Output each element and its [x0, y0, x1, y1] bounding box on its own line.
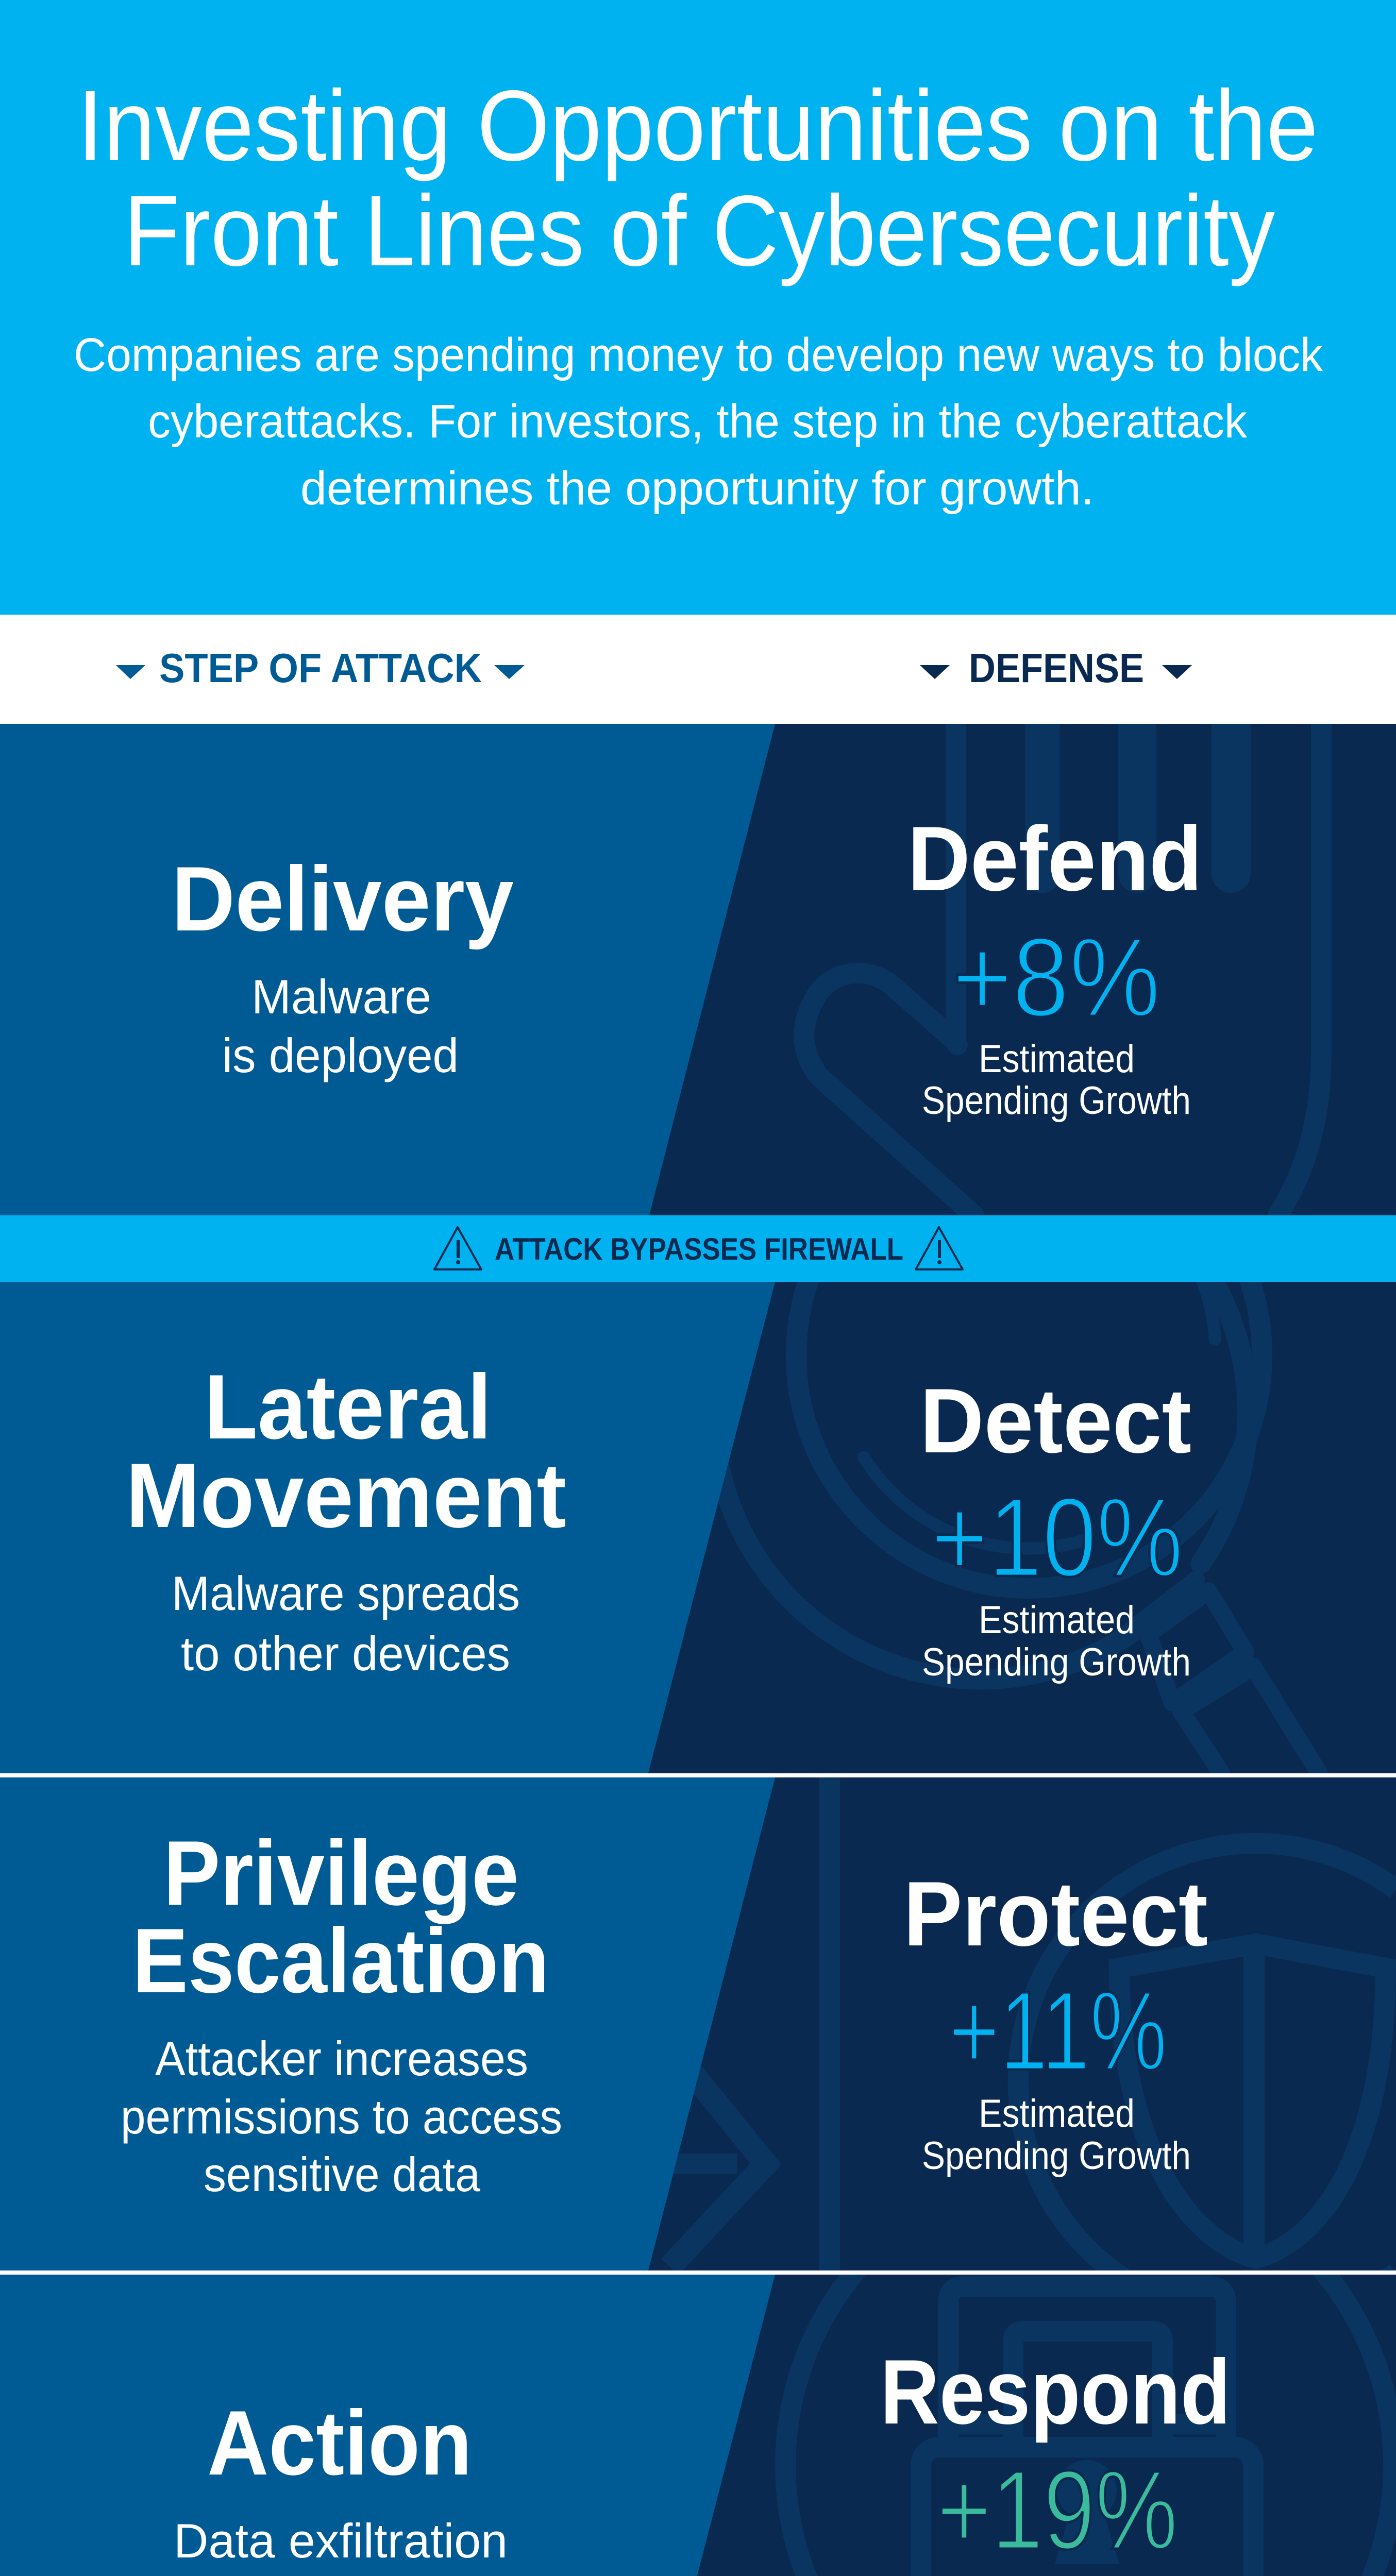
icon: warning triangle left: [434, 1227, 481, 1269]
defense text: protect: Protect: [903, 1862, 1208, 1965]
warning band: [0, 1215, 1396, 1282]
defense text: detect: Spending Growth: [922, 1640, 1191, 1684]
title: [77, 70, 1318, 287]
step text: privilege escalation: Escalation: [132, 1909, 549, 2012]
step text: lateral movement: Movement: [126, 1444, 566, 1547]
defense text: respond: +19%: [937, 2448, 1178, 2573]
step text: delivery: Malware: [251, 970, 431, 1024]
column header band: [0, 615, 1396, 724]
title: Investing Opportunities on the: [77, 70, 1318, 182]
icon: ghost hand: [804, 724, 1321, 1215]
step text: lateral movement: to other devices: [181, 1626, 510, 1681]
defense text: detect: [920, 1369, 1191, 1684]
icon: ghost shield with arrow: [662, 1777, 1396, 2270]
defense text: protect: Estimated: [979, 2092, 1135, 2136]
left blue wedge: [0, 724, 775, 1215]
defense text: respond: [880, 2341, 1231, 2576]
step text: privilege escalation: sensitive data: [204, 2147, 481, 2201]
step text: delivery: Delivery: [172, 848, 514, 950]
icon: warning triangle right: [916, 1227, 963, 1269]
step text: lateral movement: [126, 1355, 566, 1681]
left blue wedge: [0, 1282, 775, 1773]
defense text: detect: +10%: [931, 1475, 1183, 1600]
left blue wedge: [0, 1777, 775, 2270]
intro paragraph: Companies are spending money to develop new ways to block: [74, 329, 1323, 381]
defense text: defend: +8%: [952, 915, 1160, 1040]
defense text: detect: Estimated: [979, 1598, 1135, 1642]
panel: lateral movement / detect: [0, 1282, 1328, 1773]
defense text: protect: [903, 1862, 1208, 2178]
panel: delivery / defend: [0, 724, 1396, 1215]
defense text: defend: Defend: [907, 807, 1202, 910]
panel: action / respond: [0, 2275, 1396, 2576]
step text: action: Data exfiltration: [174, 2514, 508, 2568]
icon: ghost magnifying glass: [718, 1282, 1328, 1773]
defense text: defend: Spending Growth: [922, 1079, 1191, 1123]
header panel: [0, 0, 1396, 615]
warning label: ATTACK BYPASSES FIREWALL: [495, 1232, 903, 1266]
step text: privilege escalation: permissions to access: [121, 2090, 562, 2144]
heading: step of attack: STEP OF ATTACK: [159, 645, 482, 691]
defense text: defend: Estimated: [979, 1037, 1135, 1081]
icon: ghost chat bubble with lock: [775, 2275, 1396, 2576]
step text: lateral movement: Malware spreads: [172, 1566, 520, 1620]
step text: delivery: is deployed: [222, 1028, 459, 1082]
step text: action: Action: [207, 2392, 472, 2494]
step text: lateral movement: Lateral: [204, 1355, 492, 1458]
title: Front Lines of Cybersecurity: [124, 175, 1275, 287]
step text: delivery: [172, 848, 514, 1082]
step text: privilege escalation: Privilege: [163, 1822, 519, 1924]
step text: action: [119, 2392, 564, 2576]
heading: defense: DEFENSE: [969, 645, 1144, 691]
defense text: protect: +11%: [949, 1969, 1167, 2094]
left blue wedge: [0, 2275, 775, 2576]
step text: privilege escalation: Attacker increases: [155, 2031, 528, 2086]
defense text: protect: Spending Growth: [922, 2134, 1191, 2178]
intro paragraph: determines the opportunity for growth.: [300, 462, 1094, 515]
panel: privilege escalation / protect: [0, 1777, 1396, 2318]
defense text: defend: [907, 807, 1202, 1123]
intro paragraph: [74, 329, 1323, 515]
step text: privilege escalation: [121, 1822, 562, 2201]
intro paragraph: cyberattacks. For investors, the step in the cyberattack: [148, 395, 1248, 448]
defense text: detect: Detect: [920, 1369, 1191, 1472]
defense text: respond: Respond: [880, 2341, 1231, 2443]
